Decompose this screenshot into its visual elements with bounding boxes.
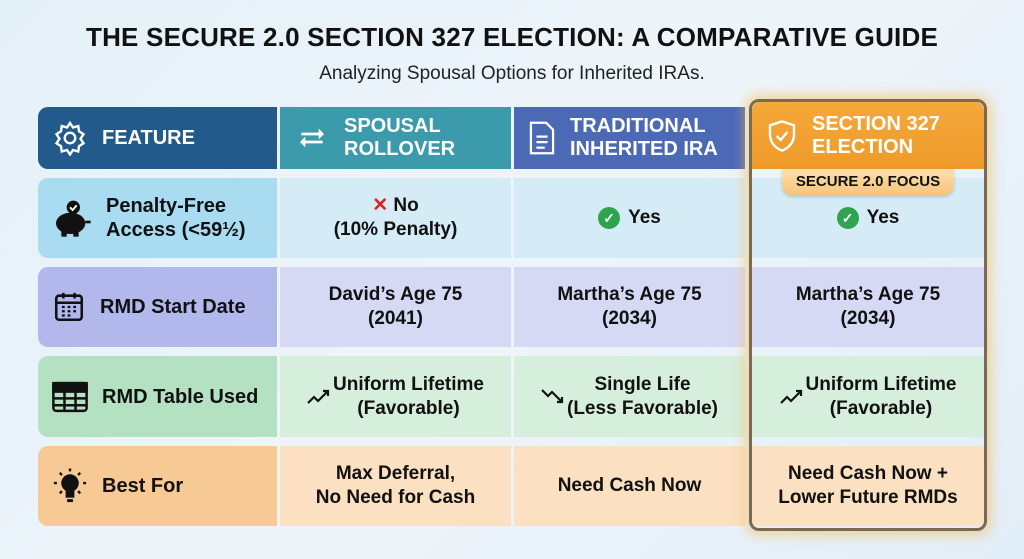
row 1: penalty-free access [38,178,984,258]
cell: section 327 uniform lifetime: (Favorable) [830,398,932,418]
title: THE SECURE 2.0 SECTION 327 ELECTION: A COMPARATIVE GUIDE [86,22,938,52]
feature: rmd table used: RMD Table Used [102,386,258,408]
cell: section 327 martha's age [752,267,984,347]
cell: spousal uniform lifetime [280,356,511,437]
cell: section 327 yes: Yes [867,207,899,228]
header: traditional inherited IRA: INHERITED IRA [570,138,718,160]
cell: spousal max deferral: No Need for Cash [316,487,475,508]
feature: penalty-free access: Penalty-Free [106,195,226,217]
header: section 327 election: SECTION 327 [812,112,940,134]
cell: spousal no: ✕ No [372,195,419,216]
header: feature [38,107,277,169]
header: section 327 election: ELECTION [812,136,913,158]
cell: traditional need cash now: Need Cash Now [558,475,701,496]
cell: spousal david's age: David’s Age 75 [329,284,462,305]
cell: section 327 yes: ✓ [842,210,853,226]
cell: traditional yes: ✓ [603,210,615,226]
cell: traditional yes [514,178,745,258]
header: feature: FEATURE [102,126,195,148]
badge: secure 2.0 focus: SECURE 2.0 FOCUS [796,173,940,190]
cell: section 327 uniform lifetime [752,356,984,437]
cell: spousal uniform lifetime: (Favorable) [357,398,460,418]
cell: section 327 martha's age: Martha’s Age 75 [796,284,940,305]
subtitle: Analyzing Spousal Options for Inherited IRAs. [319,63,705,84]
header: section 327 election [752,102,984,169]
cell: section 327 need cash + lower RMDs [752,446,984,526]
feature: penalty-free access: Access (<59½) [106,219,246,241]
header: spousal rollover: SPOUSAL [344,115,441,137]
header: spousal rollover [280,107,511,169]
cell: spousal max deferral [280,446,511,526]
cell: section 327 martha's age: (2034) [841,308,895,329]
cell: spousal david's age [280,267,511,347]
row 2: rmd start date [38,267,984,347]
row 3: rmd table used [38,356,984,437]
cell: spousal no [280,178,511,258]
cell: spousal max deferral: Max Deferral, [336,463,455,484]
header: spousal rollover: ROLLOVER [344,138,455,160]
feature: rmd start date: RMD Start Date [100,296,246,318]
cell: traditional yes: Yes [628,207,661,228]
cell: traditional martha's age: (2034) [602,308,657,329]
feature: rmd table used [38,356,277,437]
cell: section 327 yes [752,178,984,258]
header: traditional inherited IRA [514,107,745,169]
row 4: best for [38,446,984,526]
cell: traditional martha's age: Martha’s Age 75 [557,284,702,305]
badge: secure 2.0 focus [782,169,954,195]
cell: spousal david's age: (2041) [368,308,423,329]
cell: traditional single life: Single Life [594,374,691,394]
cell: spousal uniform lifetime: Uniform Lifetime [333,374,484,394]
cell: section 327 need cash + lower RMDs: Need Cash Now + [788,463,948,484]
cell: section 327 need cash + lower RMDs: Lower Future RMDs [778,487,958,508]
cell: traditional martha's age [514,267,745,347]
cell: traditional single life [514,356,745,437]
cell: section 327 uniform lifetime: Uniform Lifetime [806,374,956,394]
feature: best for: Best For [102,475,183,497]
feature: best for [38,446,277,526]
cell: traditional need cash now [514,446,745,526]
feature: rmd start date [38,267,277,347]
header: traditional inherited IRA: TRADITIONAL [570,115,706,137]
cell: traditional single life: (Less Favorable) [567,398,718,418]
feature: penalty-free access [38,178,277,258]
highlight frame: section 327 column [749,99,987,531]
cell: spousal no: (10% Penalty) [334,219,457,240]
